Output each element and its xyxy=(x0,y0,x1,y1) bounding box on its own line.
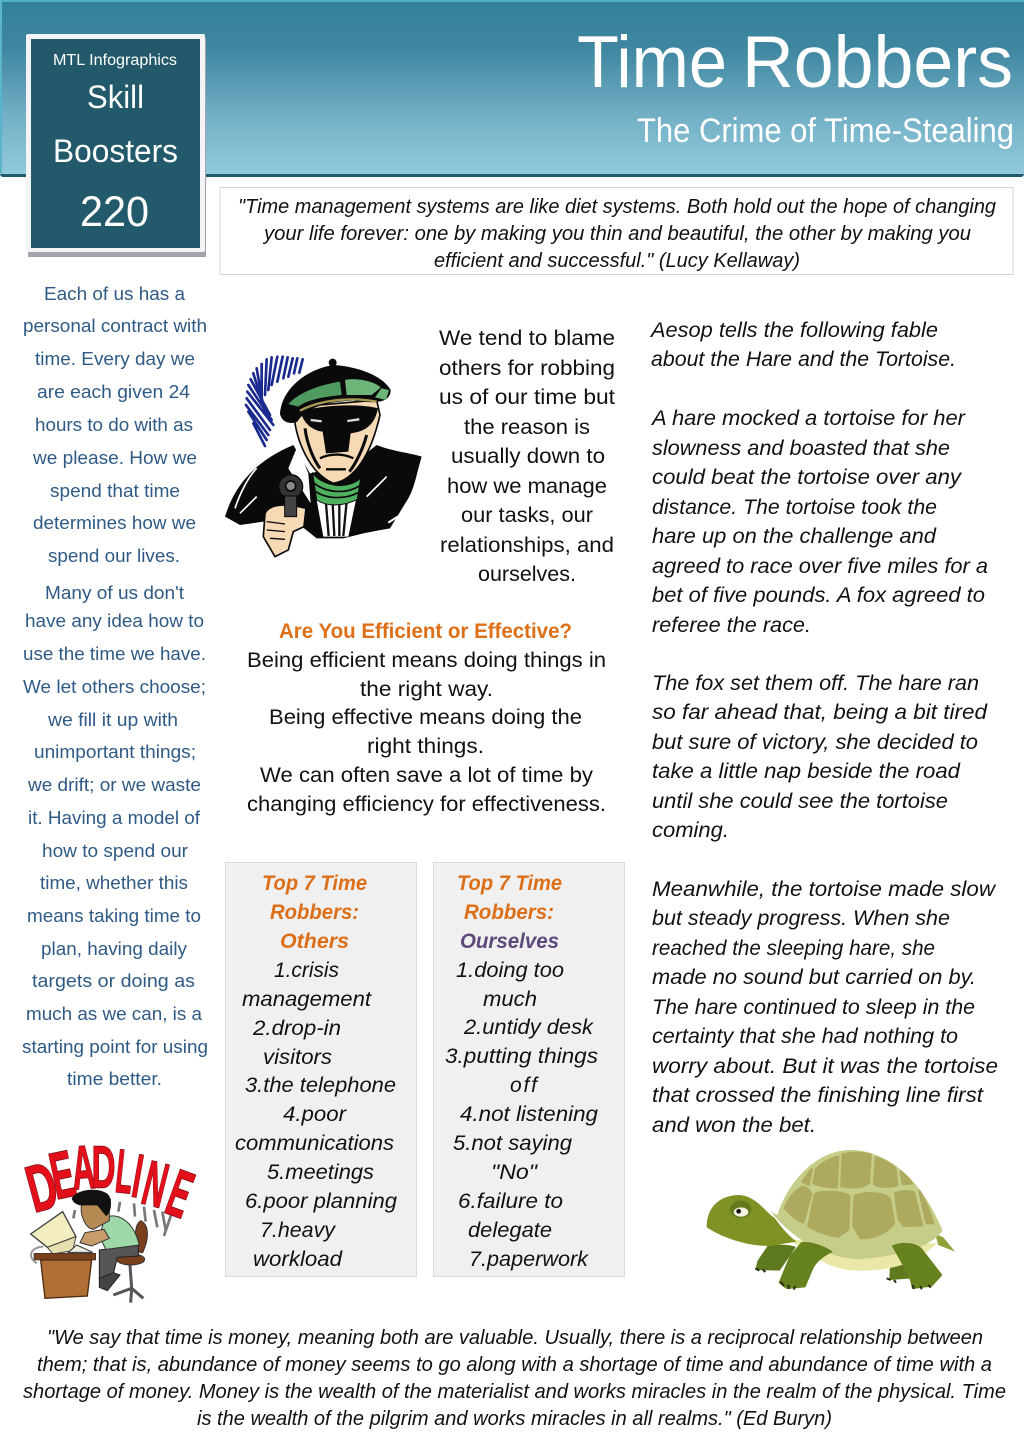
left column text: spend our lives. xyxy=(48,545,180,566)
left column text: use the time we have. xyxy=(23,643,206,664)
intro paragraph xyxy=(439,327,615,586)
icon: deadline cartoon: E xyxy=(158,1155,203,1232)
panel: top 7 time robbers, others: 2.drop-in xyxy=(252,1017,341,1040)
right column: Aesop fable: referee the race. xyxy=(652,614,811,637)
intro paragraph: relationships, and xyxy=(440,534,614,557)
left column text: hours to do with as xyxy=(35,414,193,435)
title: Time xyxy=(577,22,727,103)
right column: Aesop fable: worry about. But it was the tortoise xyxy=(652,1055,998,1078)
badge: Skill Boosters 220: Boosters xyxy=(53,133,178,169)
left column text: much as we can, is a xyxy=(26,1003,203,1024)
icon: deadline cartoon: A xyxy=(70,1134,97,1203)
efficient or effective section: We can often save a lot of time by xyxy=(260,764,594,787)
panel: top 7 time robbers, ourselves: Robbers: xyxy=(464,901,554,924)
right column: Aesop fable: so far ahead that, being a bit tired xyxy=(652,701,988,724)
efficient or effective section xyxy=(247,620,606,816)
icon: deadline cartoon xyxy=(19,1134,203,1303)
intro paragraph: how we manage xyxy=(447,475,607,498)
panel: top 7 time robbers, ourselves: Ourselves xyxy=(460,930,559,953)
left column text: we drift; or we waste xyxy=(27,774,201,795)
left column text: spend that time xyxy=(50,480,180,501)
left column text: starting point for using xyxy=(22,1036,208,1057)
panel: top 7 time robbers, ourselves: 5.not saying xyxy=(453,1132,572,1155)
right column: Aesop fable: and won the bet. xyxy=(652,1114,816,1137)
panel: top 7 time robbers, others: workload xyxy=(253,1248,343,1271)
left column text: we please. How we xyxy=(32,447,197,468)
left column text: personal contract with xyxy=(23,315,207,336)
icon: deadline cartoon: E xyxy=(44,1137,81,1214)
right column: Aesop fable: The hare continued to sleep in the xyxy=(652,996,975,1019)
left column text: determines how we xyxy=(33,512,196,533)
intro paragraph: the reason is xyxy=(464,416,590,439)
top quote box: "Time management systems are like diet systems. Both hold out the hope of changing xyxy=(238,196,996,218)
right column: Aesop fable: certainty that she had nothing to xyxy=(652,1025,958,1048)
icon: deadline cartoon: D xyxy=(19,1148,65,1227)
badge: Skill Boosters 220: MTL Infographics xyxy=(53,52,177,69)
panel: top 7 time robbers, others: 6.poor planning xyxy=(245,1190,397,1213)
panel: top 7 time robbers, others: Others xyxy=(280,930,349,953)
left column text: time, whether this xyxy=(40,872,188,893)
panel: top 7 time robbers, ourselves xyxy=(434,862,624,1276)
badge: Skill Boosters 220 xyxy=(26,34,206,257)
right column: Aesop fable xyxy=(649,319,998,1137)
panel: top 7 time robbers, others: Top 7 Time xyxy=(262,872,367,895)
right column: Aesop fable: The fox set them off. The hare ran xyxy=(652,672,979,695)
panel: top 7 time robbers, ourselves: Top 7 Time xyxy=(457,872,562,895)
panel: top 7 time robbers, ourselves: off xyxy=(510,1074,539,1097)
right column: Aesop fable: reached the sleeping hare, she xyxy=(652,937,935,960)
right column: Aesop fable: coming. xyxy=(652,819,729,842)
left column text: time. Every day we xyxy=(35,348,195,369)
left column text: Each of us has a xyxy=(44,283,186,304)
header banner xyxy=(0,0,1024,177)
left column text: are each given 24 xyxy=(37,381,190,402)
panel: top 7 time robbers, ourselves: 1.doing too xyxy=(456,959,564,982)
icon: deadline cartoon: D xyxy=(92,1135,115,1201)
panel: top 7 time robbers, ourselves: 6.failure to xyxy=(458,1190,563,1213)
right column: Aesop fable: A hare mocked a tortoise for her xyxy=(650,407,966,430)
top quote box: efficient and successful." (Lucy Kellaway) xyxy=(434,250,800,272)
panel: top 7 time robbers, others: Robbers: xyxy=(270,901,359,924)
panel: top 7 time robbers, others: 3.the telephone xyxy=(245,1074,396,1097)
right column: Aesop fable: but steady progress. When she xyxy=(652,907,950,930)
left column text: it. Having a model of xyxy=(28,807,201,828)
efficient or effective section: Are You Efficient or Effective? xyxy=(279,620,572,643)
title xyxy=(577,22,1013,103)
left column text: unimportant things; xyxy=(34,741,196,762)
top quote box xyxy=(220,188,1013,274)
panel: top 7 time robbers, others: 5.meetings xyxy=(267,1161,375,1184)
panel: top 7 time robbers, others: communications xyxy=(235,1132,395,1155)
panel: top 7 time robbers, others: 7.heavy xyxy=(260,1219,337,1242)
intro paragraph: others for robbing xyxy=(439,357,615,380)
efficient or effective section: right things. xyxy=(367,735,484,758)
efficient or effective section: changing efficiency for effectiveness. xyxy=(247,793,606,816)
badge: Skill Boosters 220: Skill xyxy=(87,79,144,115)
left column text: We let others choose; xyxy=(23,676,206,697)
intro paragraph: us of our time but xyxy=(439,386,615,409)
intro paragraph: We tend to blame xyxy=(439,327,615,350)
right column: Aesop fable: but sure of victory, she decided to xyxy=(652,731,978,754)
right column: Aesop fable: made no sound but carried on by. xyxy=(652,966,976,989)
left column text: targets or doing as xyxy=(32,970,195,991)
bottom quote: shortage of money. Money is the wealth of the materialist and works miracles in the realm of the physical. Time xyxy=(23,1381,1006,1403)
right column: Aesop fable: could beat the tortoise over any xyxy=(652,466,963,489)
intro paragraph: our tasks, our xyxy=(461,504,593,527)
left column text: how to spend our xyxy=(42,840,188,861)
right column: Aesop fable: take a little nap beside the road xyxy=(652,760,961,783)
left column text: Many of us don't xyxy=(45,582,184,603)
right column: Aesop fable: Meanwhile, the tortoise made slow xyxy=(652,878,997,901)
panel: top 7 time robbers, ourselves: "No" xyxy=(491,1161,539,1184)
right column: Aesop fable: about the Hare and the Tortoise. xyxy=(651,348,956,371)
bottom quote xyxy=(23,1327,1006,1430)
right column: Aesop fable: hare up on the challenge and xyxy=(652,525,937,548)
left column text: we fill it up with xyxy=(47,709,178,730)
panel: top 7 time robbers, ourselves: 3.putting things xyxy=(445,1045,599,1068)
panel: top 7 time robbers, others: management xyxy=(242,988,372,1011)
efficient or effective section: the right way. xyxy=(360,678,493,701)
panel: top 7 time robbers, others: 1.crisis xyxy=(274,959,339,982)
bottom quote: them; that is, abundance of money seems to go along with a shortage of time and abundance of time with a xyxy=(37,1354,992,1376)
icon: deadline cartoon: L xyxy=(113,1138,136,1208)
efficient or effective section: Being effective means doing the xyxy=(269,706,582,729)
left column text: have any idea how to xyxy=(25,610,204,631)
icon: tortoise xyxy=(707,1150,955,1290)
right column: Aesop fable: distance. The tortoise took the xyxy=(652,496,937,519)
panel: top 7 time robbers, ourselves: much xyxy=(483,988,537,1011)
right column: Aesop fable: bet of five pounds. A fox agreed to xyxy=(652,584,985,607)
right column: Aesop fable: slowness and boasted that she xyxy=(652,437,950,460)
panel: top 7 time robbers, others: 4.poor xyxy=(283,1103,347,1126)
left column text: plan, having daily xyxy=(41,938,188,959)
panel: top 7 time robbers, others xyxy=(226,862,416,1276)
panel: top 7 time robbers, ourselves: 7.paperwork xyxy=(469,1248,590,1271)
panel: top 7 time robbers, ourselves: delegate xyxy=(468,1219,552,1242)
intro paragraph: usually down to xyxy=(451,445,605,468)
efficient or effective section: Being efficient means doing things in xyxy=(247,649,606,672)
right column: Aesop fable: until she could see the tortoise xyxy=(652,790,948,813)
title: Robbers xyxy=(742,22,1013,103)
panel: top 7 time robbers, others: visitors xyxy=(263,1046,333,1069)
right column: Aesop fable: agreed to race over five miles for a xyxy=(652,555,988,578)
intro paragraph: ourselves. xyxy=(478,563,576,586)
right column: Aesop fable: that crossed the finishing line first xyxy=(652,1084,984,1107)
badge: Skill Boosters 220: 220 xyxy=(80,188,149,236)
left column text: time better. xyxy=(67,1068,162,1089)
icon: deadline cartoon: I xyxy=(128,1142,148,1211)
panel: top 7 time robbers, ourselves: 4.not listening xyxy=(460,1103,598,1126)
top quote box: your life forever: one by making you thin and beautiful, the other by making you xyxy=(262,223,971,245)
right column: Aesop fable: Aesop tells the following fable xyxy=(649,319,938,342)
panel: top 7 time robbers, ourselves: 2.untidy desk xyxy=(463,1016,595,1039)
icon: deadline cartoon: N xyxy=(136,1147,175,1222)
left column text xyxy=(22,283,208,1089)
bottom quote: is the wealth of the pilgrim and works miracles in all realms." (Ed Buryn) xyxy=(197,1408,832,1430)
icon: masked robber pointing a gun xyxy=(225,357,422,557)
bottom quote: "We say that time is money, meaning both are valuable. Usually, there is a reciprocal relationship between xyxy=(47,1327,983,1349)
left column text: means taking time to xyxy=(27,905,201,926)
